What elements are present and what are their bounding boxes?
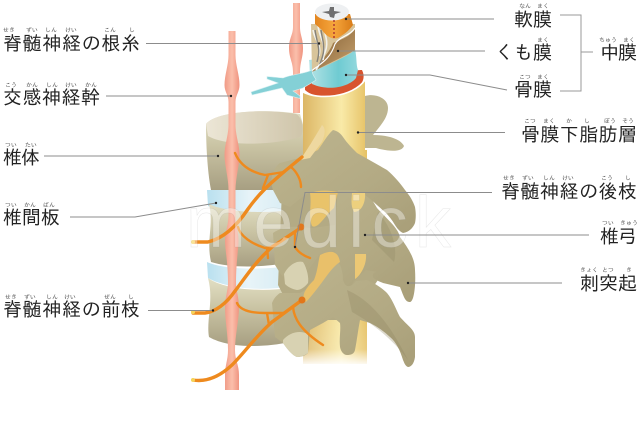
label: 中膜: ちゅう xyxy=(599,37,617,44)
yellow gap 4 xyxy=(355,254,366,279)
label: 骨膜: まく xyxy=(537,74,549,81)
label: くも膜: くも膜 xyxy=(495,43,552,64)
vertebra 1 top face xyxy=(206,111,303,144)
label: 脊髄神経の根糸: せき xyxy=(3,27,15,34)
watermark: medick xyxy=(186,183,452,263)
leader lines xyxy=(44,18,589,312)
label: 脊髄神経の後枝: 脊髄神経の後枝 xyxy=(501,181,637,203)
label: 椎弓: 椎弓 xyxy=(600,226,637,248)
label: 脊髄神経の後枝: し xyxy=(625,175,631,182)
panel: spinal nerves xyxy=(191,153,323,382)
transverse process upper right xyxy=(365,95,404,151)
label: 骨膜下脂肪層: か xyxy=(566,118,572,125)
nerve tips xyxy=(191,240,195,382)
label: 椎間板: かん xyxy=(24,202,36,209)
label: 脊髄神経の根糸: し xyxy=(129,27,135,34)
disc 1 xyxy=(207,190,295,215)
label: 交感神経幹: しん xyxy=(46,82,58,89)
arachnoid brown flap xyxy=(312,28,355,72)
label: 椎間板: ばん xyxy=(43,201,55,209)
label: 軟膜: まく xyxy=(537,3,549,10)
label: 脊髄神経の前枝: けい xyxy=(64,294,76,301)
teal spinal nerve sleeve xyxy=(251,70,316,98)
label: 脊髄神経の前枝: し xyxy=(128,294,134,301)
upper nerve xyxy=(193,153,302,242)
panel: vertebral bodies xyxy=(206,111,306,346)
label: 刺突起: き xyxy=(626,267,632,274)
label: 軟膜: 軟膜 xyxy=(514,9,552,31)
middle nerve xyxy=(193,224,310,313)
vertebra 1 xyxy=(272,130,416,233)
fat ring xyxy=(305,70,364,96)
left sympathetic trunk xyxy=(224,31,240,390)
label: 中膜: 中膜 xyxy=(600,43,637,64)
lamina light knob xyxy=(284,262,308,290)
label: 脊髄神経の前枝: ぜん xyxy=(104,293,116,301)
label: 骨膜: 骨膜 xyxy=(514,80,552,101)
yellow gap 1 xyxy=(310,191,338,227)
nerve rootlets xyxy=(313,26,327,70)
label: 骨膜下脂肪層: 骨膜下脂肪層 xyxy=(521,125,637,146)
dura (teal membrane) xyxy=(309,49,358,88)
label: 交感神経幹: かん xyxy=(85,82,97,89)
label: 骨膜下脂肪層: まく xyxy=(543,118,555,125)
label: 脊髄神経の前枝: せき xyxy=(5,294,17,301)
bracket: 中膜 xyxy=(560,15,593,91)
label: 刺突起: とつ xyxy=(602,267,614,274)
arachnoid xyxy=(311,24,355,72)
darker shading xyxy=(347,290,408,360)
vertebra 2 xyxy=(273,188,415,302)
label: 骨膜下脂肪層: そう xyxy=(622,118,634,125)
label: 椎体: 椎体 xyxy=(3,147,40,169)
label: 脊髄神経の後枝: こう xyxy=(601,175,613,182)
label: 脊髄神経の後枝: しん xyxy=(543,175,555,182)
knob lower xyxy=(283,332,308,357)
vertebra 1 xyxy=(206,111,306,190)
label: 脊髄神経の後枝: せき xyxy=(503,175,515,182)
label: 骨膜: こつ xyxy=(519,74,531,81)
pale ligament stalk xyxy=(300,125,325,160)
disc 2 xyxy=(207,262,290,289)
label: 骨膜下脂肪層: こつ xyxy=(524,118,536,125)
lower nerve xyxy=(193,296,323,380)
yellow gap 2 xyxy=(352,192,365,212)
label: 椎間板: つい xyxy=(5,202,17,209)
central bone backing xyxy=(278,190,378,320)
label: 椎間板: 椎間板 xyxy=(3,207,60,229)
yellow gap 3 xyxy=(304,252,340,302)
label: 脊髄神経の後枝: ずい xyxy=(522,174,534,182)
label: 骨膜下脂肪層: ぼう xyxy=(604,117,616,125)
label: 刺突起: 刺突起 xyxy=(580,273,637,295)
label: 脊髄神経の前枝: しん xyxy=(46,294,58,301)
label: 脊髄神経の前枝: ずい xyxy=(24,293,36,301)
cord top xyxy=(315,4,349,20)
label: 交感神経幹: かん xyxy=(26,82,38,89)
label: 中膜: まく xyxy=(623,37,635,44)
label: 脊髄神経の根糸: 脊髄神経の根糸 xyxy=(3,33,140,55)
label: 脊髄神経の前枝: 脊髄神経の前枝 xyxy=(3,299,140,321)
label: くも膜: まく xyxy=(537,37,549,44)
vertebra 2 xyxy=(209,204,292,266)
spinal column xyxy=(303,80,367,364)
label: 椎弓: きゅう xyxy=(620,220,638,227)
label: 交感神経幹: 交感神経幹 xyxy=(3,87,100,109)
label: 脊髄神経の根糸: ずい xyxy=(26,26,38,34)
label: 脊髄神経の後枝: けい xyxy=(562,175,574,182)
label: 脊髄神経の根糸: こん xyxy=(104,27,116,34)
panel: posterior bone xyxy=(272,95,416,367)
vertebra 3 xyxy=(208,278,290,346)
pia / orange cord xyxy=(315,14,353,39)
label: 交感神経幹: こう xyxy=(5,82,17,89)
vertebra 3 xyxy=(272,259,415,367)
label: 椎体: たい xyxy=(25,142,37,149)
gray matter xyxy=(322,7,341,18)
label: 椎弓: つい xyxy=(602,220,614,227)
label: 骨膜下脂肪層: し xyxy=(584,118,590,125)
label: 軟膜: なん xyxy=(519,3,531,10)
back sympathetic trunk xyxy=(289,3,303,113)
label: 脊髄神経の根糸: しん xyxy=(45,27,57,34)
label: 刺突起: きょく xyxy=(580,267,598,274)
label: 交感神経幹: けい xyxy=(65,82,77,89)
label: 椎体: つい xyxy=(5,142,17,149)
panel: spinal cord cross-section xyxy=(251,4,365,98)
label: 脊髄神経の根糸: けい xyxy=(65,27,77,34)
